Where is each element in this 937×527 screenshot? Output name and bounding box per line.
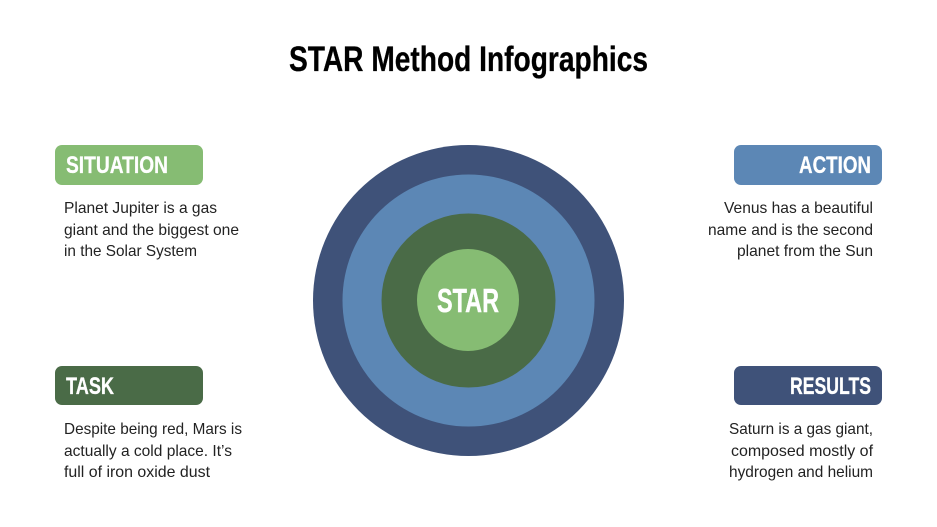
panel: situation: [55, 145, 239, 260]
title: STAR Method Infographics: [289, 40, 648, 79]
panel: task: Despite being red, Mars is: [64, 421, 242, 438]
panel: action: Venus has a beautiful: [724, 200, 873, 217]
panel: results: [729, 366, 882, 481]
concentric circles diagram: [313, 145, 624, 456]
panel: task: full of iron oxide dust: [64, 464, 211, 481]
center label: STAR: [437, 282, 499, 319]
panel: results: RESULTS: [790, 373, 871, 400]
panel: action: [708, 145, 882, 260]
panel: results: Saturn is a gas giant,: [729, 421, 873, 438]
panel: results: composed mostly of: [731, 443, 874, 460]
panel: situation: in the Solar System: [64, 243, 197, 260]
panel: situation: SITUATION: [66, 152, 168, 179]
panel: action: planet from the Sun: [737, 243, 873, 260]
panel: action: name and is the second: [708, 222, 873, 239]
panel: action: ACTION: [799, 152, 871, 179]
panel: situation: giant and the biggest one: [64, 222, 239, 239]
panel: results: hydrogen and helium: [729, 464, 873, 481]
panel: situation: Planet Jupiter is a gas: [64, 200, 217, 217]
panel: task: actually a cold place. It’s: [64, 443, 232, 460]
panel: task: [55, 366, 242, 481]
panel: task: TASK: [66, 373, 114, 400]
